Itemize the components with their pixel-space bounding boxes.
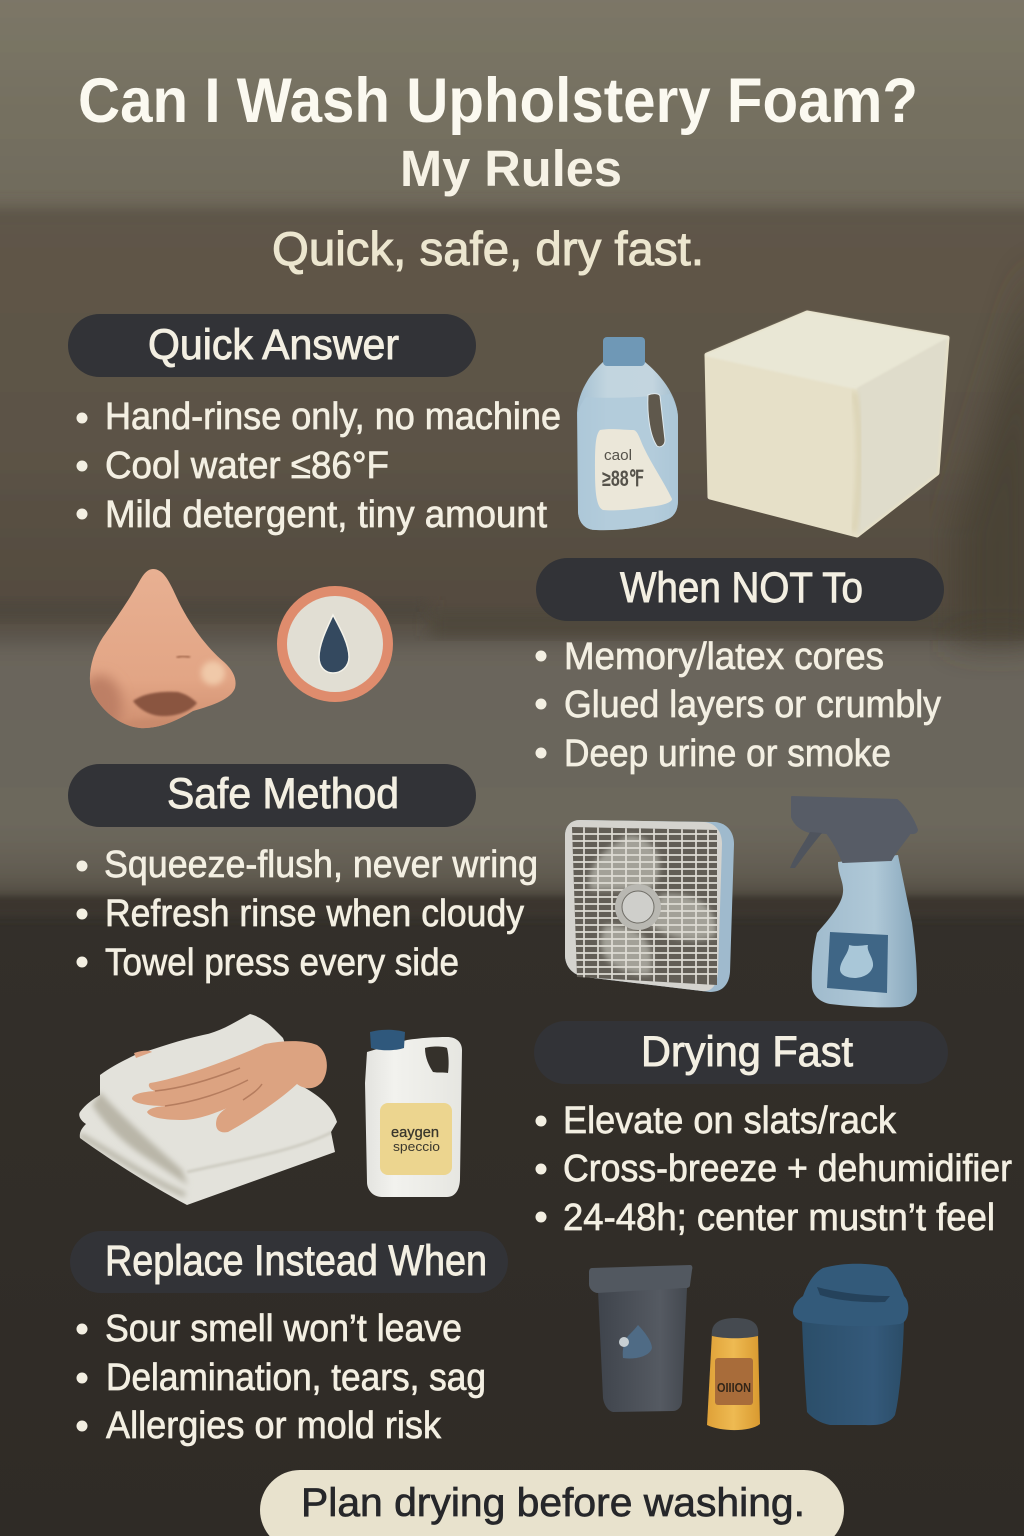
panel: When NOT To xyxy=(536,558,944,775)
heading pill: Safe Method xyxy=(68,764,476,827)
heading pill: Safe Method: Safe Method xyxy=(167,770,399,818)
bullet list: Drying Fast: 24-48h; center mustn’t feel xyxy=(563,1197,995,1239)
heading pill: When NOT To: When NOT To xyxy=(620,564,863,612)
bullet list: Quick Answer: Mild detergent, tiny amount xyxy=(105,494,547,536)
icon: yellow can xyxy=(707,1318,760,1430)
heading pill: Replace Instead When xyxy=(70,1231,508,1293)
heading pill: Quick Answer xyxy=(68,314,476,377)
title: Can I Wash Upholstery Foam? xyxy=(78,66,918,136)
icon: grey container xyxy=(589,1265,692,1412)
heading pill: Drying Fast xyxy=(534,1021,948,1084)
bullet list: Drying Fast xyxy=(536,1100,1012,1239)
bullet list: Safe Method: Towel press every side xyxy=(105,942,459,984)
bullet list: Replace Instead When: Delamination, tears, sag xyxy=(106,1357,486,1399)
bullet list: Quick Answer: Hand-rinse only, no machine xyxy=(105,396,561,438)
panel: Quick Answer xyxy=(68,314,561,536)
tagline: Quick, safe, dry fast. xyxy=(272,222,704,275)
bullet list: Replace Instead When: Sour smell won’t leave xyxy=(105,1308,462,1350)
panel: Safe Method xyxy=(68,764,538,984)
icon: white detergent jug xyxy=(365,1030,462,1197)
icon: detergent bottle labelled cool xyxy=(577,337,678,530)
bullet list: Quick Answer: Cool water ≤86°F xyxy=(105,445,389,487)
icon: nose xyxy=(90,569,236,728)
bullet list: Safe Method xyxy=(76,844,538,984)
bullet list: Replace Instead When: Allergies or mold risk xyxy=(106,1405,442,1447)
icon: towel with hand xyxy=(79,1014,337,1205)
icon: detergent bottle labelled cool: ≥88℉ xyxy=(602,466,644,491)
heading pill: When NOT To xyxy=(536,558,944,621)
bullet list: When NOT To: Deep urine or smoke xyxy=(564,733,891,775)
bullet list: When NOT To: Glued layers or crumbly xyxy=(564,684,941,726)
panel: Replace Instead When xyxy=(70,1231,508,1447)
bullet list: When NOT To: Memory/latex cores xyxy=(564,636,884,678)
bullet list: Replace Instead When xyxy=(76,1308,486,1447)
bullet list: Drying Fast: Elevate on slats/rack xyxy=(563,1100,897,1142)
icon: yellow can: OIIION xyxy=(717,1380,751,1395)
bullet list: Safe Method: Squeeze-flush, never wring xyxy=(104,844,538,886)
icon: foam cube xyxy=(707,313,947,535)
icon: box fan xyxy=(565,820,734,992)
callout: Plan drying before washing: Plan drying before washing. xyxy=(301,1481,805,1525)
icon: detergent bottle labelled cool: caol xyxy=(604,447,632,464)
icon: spray bottle xyxy=(790,797,917,1007)
callout: Plan drying before washing xyxy=(260,1470,844,1536)
icon: white detergent jug: eaygen xyxy=(391,1124,439,1141)
heading pill: Drying Fast: Drying Fast xyxy=(641,1028,853,1076)
hand xyxy=(132,1041,327,1132)
heading pill: Quick Answer: Quick Answer xyxy=(148,321,399,369)
panel: Drying Fast xyxy=(534,1021,1012,1239)
icon: water drop badge xyxy=(277,586,393,702)
bullet list: When NOT To xyxy=(536,636,941,775)
bullet list: Safe Method: Refresh rinse when cloudy xyxy=(105,893,524,935)
icon: blue bin xyxy=(793,1264,908,1425)
icon: white detergent jug: speccio xyxy=(393,1139,440,1154)
subtitle: My Rules: My Rules xyxy=(400,140,622,197)
bullet list: Quick Answer xyxy=(76,396,561,536)
heading pill: Replace Instead When: Replace Instead When xyxy=(105,1237,487,1285)
